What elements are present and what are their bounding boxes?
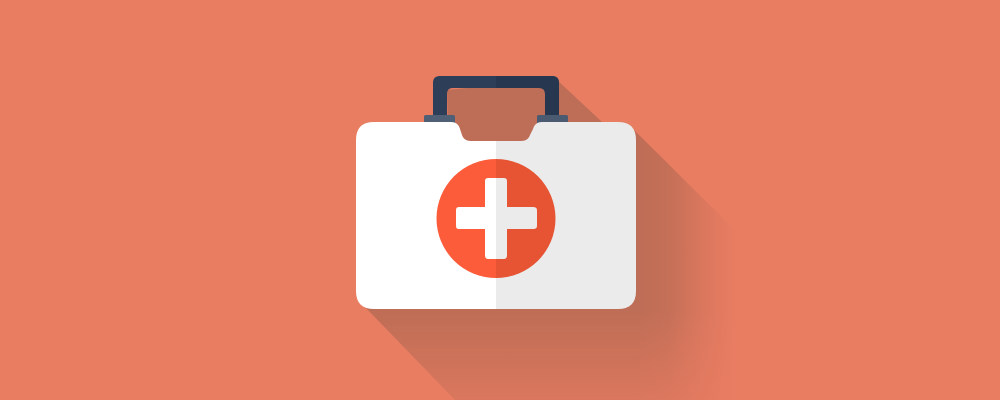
cross right half	[496, 178, 537, 259]
handle	[424, 76, 568, 123]
long shadow	[364, 79, 745, 400]
case body	[356, 122, 636, 309]
handle right half shade	[496, 76, 559, 116]
circle right half	[496, 159, 556, 278]
case left half	[356, 122, 496, 309]
cross left half	[456, 178, 496, 259]
circle left half	[437, 159, 496, 278]
medical cross badge	[437, 159, 556, 278]
handle frame	[433, 76, 559, 116]
case right half	[496, 122, 636, 309]
right handle foot	[537, 115, 568, 123]
first aid kit illustration	[356, 76, 718, 400]
left handle foot	[424, 115, 455, 123]
